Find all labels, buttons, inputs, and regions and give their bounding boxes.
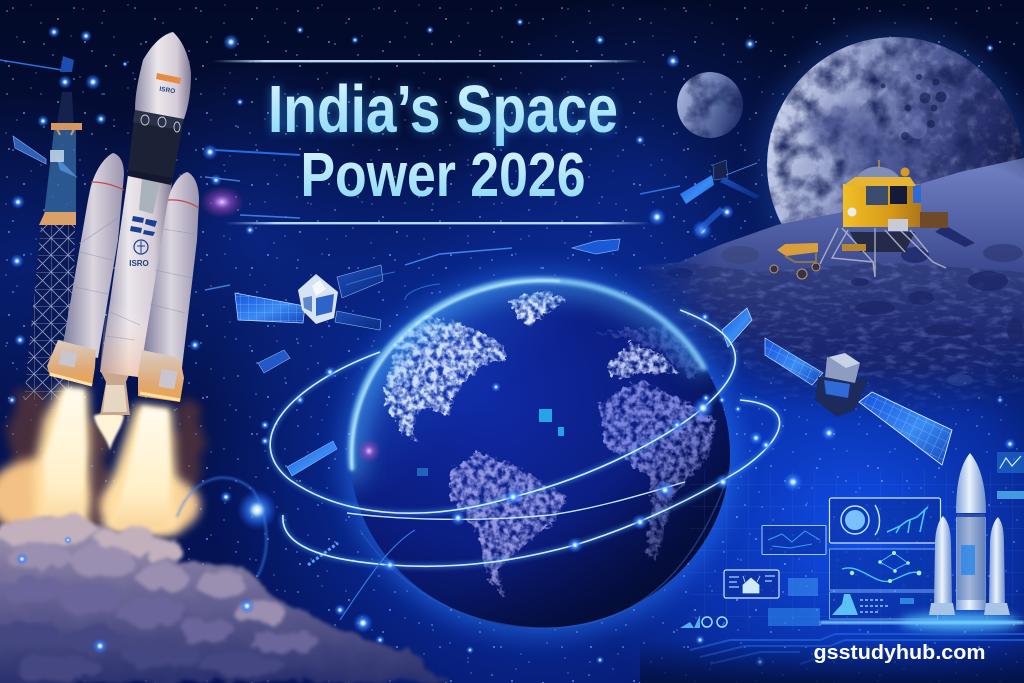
data nodes on globe: [357, 382, 564, 476]
panel: launch icon card: [724, 570, 779, 598]
rocket exhaust flames: [0, 386, 204, 540]
lander shadow: [935, 225, 975, 247]
title line two: Power 2026: [300, 141, 586, 210]
fairing: [135, 32, 191, 119]
panel: map readout: [762, 526, 826, 554]
launch tower: [0, 56, 82, 400]
title glow: India’s Space: [268, 72, 618, 147]
smoke mass: [0, 517, 450, 683]
lunar lander: [770, 160, 948, 279]
dome: [857, 167, 900, 178]
lunar surface: [620, 158, 1024, 430]
mini rocket: [900, 453, 1020, 631]
floor light band: [820, 621, 1024, 624]
rocket: [47, 32, 199, 415]
title top rule: [213, 60, 640, 62]
rocks: [667, 244, 1023, 386]
small satellite: far lower left: [308, 543, 338, 565]
orbit lines: [260, 310, 780, 620]
glowing orbit ring with star: [177, 478, 277, 577]
left booster: [47, 153, 124, 386]
africa: [598, 380, 717, 560]
circuit floor: [690, 634, 1024, 664]
small satellite: upper middle: [572, 239, 620, 254]
title block: [213, 60, 650, 224]
left flame: [34, 386, 90, 530]
atmosphere inner glow: [351, 280, 705, 480]
hill: [680, 158, 1024, 272]
core nozzle: [100, 370, 130, 415]
right booster: [138, 172, 199, 402]
ground plain: [640, 212, 1024, 417]
title line one: India’s Space: [268, 72, 618, 147]
south america: [450, 452, 567, 598]
top-left streak satellite: [215, 150, 300, 155]
greenland: [510, 290, 567, 328]
dashboard hologram: [680, 452, 1024, 631]
satellite: beside moon: [640, 160, 760, 232]
small satellite: right of earth: [722, 308, 752, 347]
fairing: ISRO: [159, 86, 176, 95]
ember haze: [8, 390, 204, 540]
stars over smoke: [16, 536, 255, 654]
moon large: [750, 18, 1024, 228]
satellites: [205, 150, 952, 565]
fire cloud: [0, 459, 88, 535]
panel: gauge and growth chart: [830, 498, 940, 543]
smoke underlay at left edge: [0, 535, 70, 683]
core flame: [94, 413, 124, 450]
small satellite: lower left: [287, 441, 337, 476]
lander undercarriage: [850, 232, 915, 252]
europe: [607, 342, 680, 380]
watermark text: gsstudyhub.com: [814, 642, 986, 664]
lander body: [843, 184, 922, 227]
small satellite: left: [258, 350, 290, 373]
title bottom rule: [225, 222, 650, 224]
panel: status module: [830, 592, 938, 619]
earth globe: [342, 272, 738, 636]
data blocks: [680, 452, 1024, 628]
asia fragment: [597, 327, 703, 380]
small satellite: center: [405, 248, 512, 265]
earth shading: [350, 280, 730, 628]
core emblem: ISRO: [129, 259, 149, 268]
satellite: left over earth: [235, 265, 383, 330]
north america: [385, 313, 508, 463]
moon small: [677, 72, 743, 138]
core stage: [100, 170, 173, 378]
panel: network curve: [830, 549, 938, 590]
satellite: lower right: [765, 338, 952, 465]
right flame: [102, 404, 178, 532]
atmospheric rim: [351, 280, 705, 470]
continents: [351, 280, 717, 598]
smoke clouds: [0, 517, 450, 683]
rover: [770, 243, 820, 279]
lander legs: [820, 228, 946, 277]
core emblem: [129, 216, 157, 268]
black interstage: [128, 110, 184, 178]
